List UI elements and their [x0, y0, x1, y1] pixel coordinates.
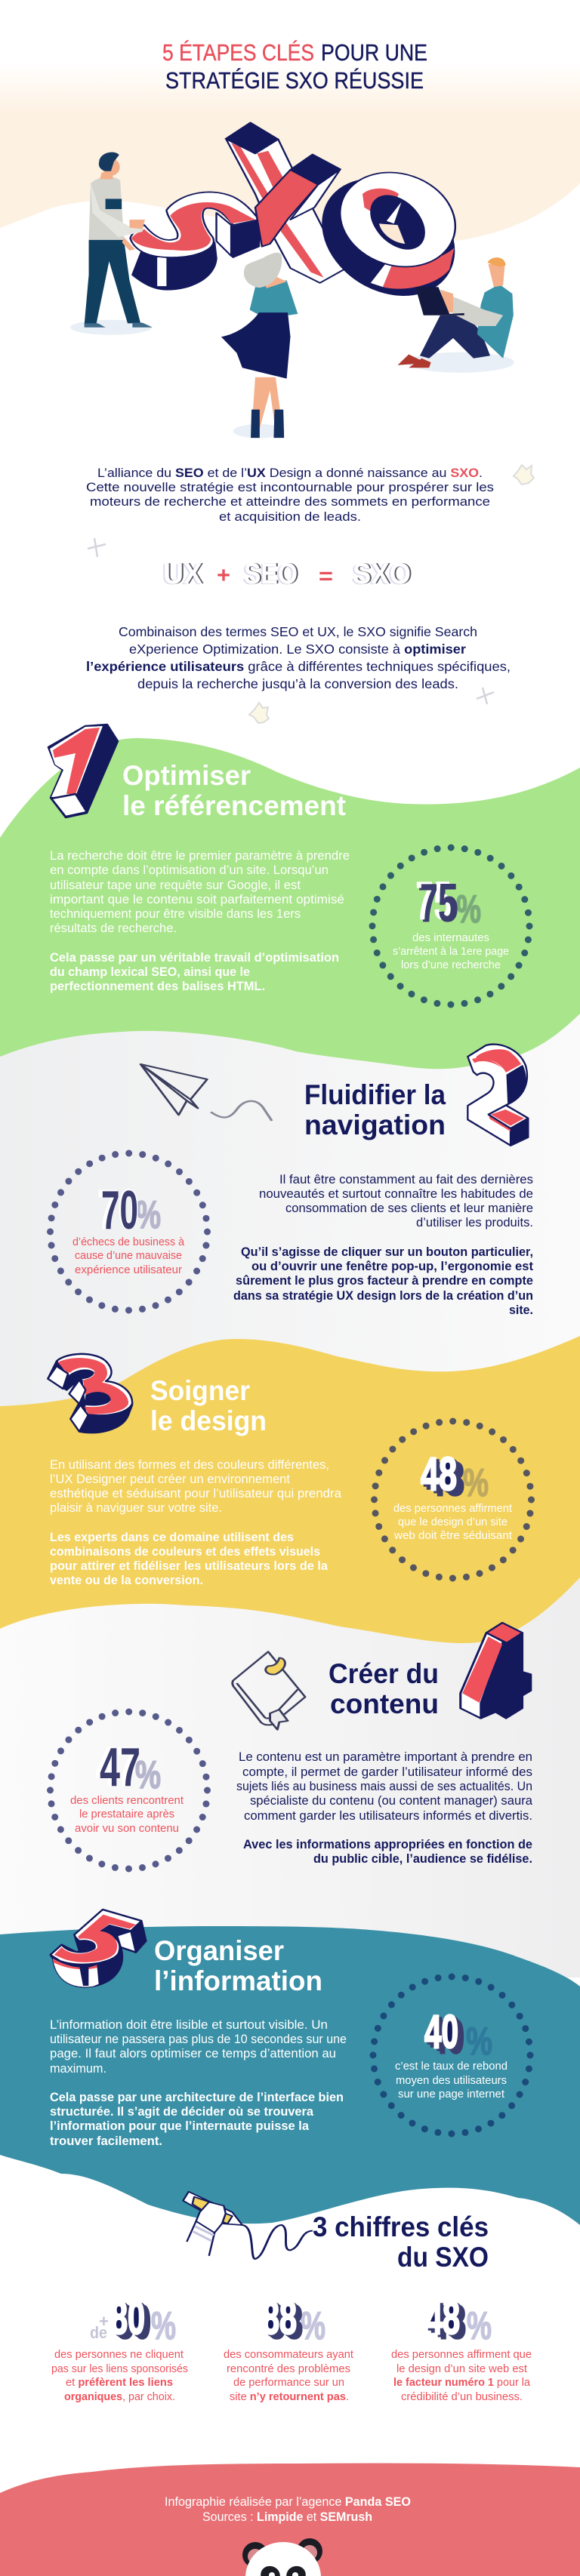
- hero illustration: [70, 122, 514, 438]
- letter X: [226, 122, 344, 283]
- heading: organiser l'information: l’information: [154, 1965, 322, 1996]
- person sitting with laptop: [398, 257, 514, 373]
- heading: créer du contenu: contenu: [330, 1688, 439, 1719]
- title: 5 ÉTAPES CLÉS: [162, 39, 314, 66]
- stat circle 48%: des personnes affirment: [393, 1502, 513, 1515]
- stat circle 75%: des internautes: [412, 931, 489, 944]
- equation UX + SEO = SXO: [162, 558, 412, 591]
- equation UX + SEO = SXO: UX: [162, 559, 201, 591]
- key figure: 88%: des consommateurs ayant: [224, 2348, 354, 2361]
- stat circle 48%: 48: [427, 1454, 464, 1506]
- heading: fluidifier la navigation: [304, 1079, 446, 1140]
- stat circle 47%: 47: [100, 1737, 140, 1798]
- text block: section 4: spécialiste du contenu (ou content manager) saura: [250, 1794, 533, 1808]
- heading: soigner le design: Soigner: [150, 1375, 250, 1406]
- equation UX + SEO = SXO: +: [217, 563, 230, 588]
- definition paragraph: Combinaison des termes SEO et UX, le SXO signifie Search: [119, 624, 477, 639]
- text block: section 4: sujets liés au business mais aussi de ses actualités. Un: [236, 1780, 532, 1793]
- key figure: 80%: +: [99, 2312, 109, 2331]
- text block: section 2: ou d’ouvrir une fenêtre pop-up, l’ergonomie est: [251, 1260, 534, 1273]
- heading: fluidifier la navigation: Fluidifier la: [304, 1079, 446, 1110]
- text block: section 5: L’information doit être lisible et surtout visible. Un: [50, 2018, 328, 2032]
- text block: section 4: du public cible, l’audience se fidélise.: [313, 1852, 532, 1866]
- text block: section 2: sûrement le plus gros facteur à prendre en compte: [236, 1274, 533, 1288]
- icon: panda mascot: [242, 2538, 322, 2576]
- text block: section 3: esthétique et séduisant pour l’utilisateur qui prendra: [50, 1487, 342, 1500]
- text block: section 4: Le contenu est un paramètre important à prendre en: [239, 1750, 532, 1764]
- stat circle 47%: 47: [96, 1737, 137, 1797]
- text block: section 4: compte, il permet de garder l’utilisateur informé des: [242, 1765, 532, 1779]
- numeral 4: [461, 1623, 531, 1719]
- text block: section 1: perfectionnement des balises HTML.: [50, 980, 265, 993]
- text block: section 1: La recherche doit être le premier paramètre à prendre: [50, 849, 350, 863]
- text block: section 3: l’UX Designer peut créer un environnement: [50, 1473, 290, 1486]
- stat circle 75%: s’arrêtent à la 1ere page: [393, 945, 509, 958]
- cross decoration: [477, 688, 494, 704]
- intro paragraph: Cette nouvelle stratégie est incontournable pour prospérer sur les: [86, 481, 494, 494]
- stat circle 70%: %: [136, 1193, 161, 1237]
- key figure: 88%: 88: [262, 2292, 297, 2344]
- stat circle 40%: [373, 1977, 530, 2134]
- equation UX + SEO = SXO: SEO: [242, 559, 296, 591]
- person standing centre: [221, 253, 298, 438]
- star decoration: [514, 465, 534, 485]
- text block: section 3: combinaisons de couleurs et des effets visuels: [50, 1545, 320, 1559]
- text block: section 2: nouveautés et surtout connaître les habitudes de: [259, 1187, 533, 1201]
- stat circle 70%: 70: [101, 1180, 138, 1241]
- footer credits: Sources : Limpide et SEMrush: [202, 2510, 372, 2524]
- person standing left: [70, 152, 153, 335]
- key figure: 88%: %: [301, 2304, 325, 2348]
- equation UX + SEO = SXO: SEO: [245, 558, 299, 590]
- equation UX + SEO = SXO: =: [319, 564, 333, 589]
- heading: organiser l'information: Organiser: [154, 1935, 284, 1966]
- equation UX + SEO = SXO: SXO: [351, 559, 409, 591]
- stat circle 47%: des clients rencontrent: [70, 1794, 184, 1807]
- text block: section 3: En utilisant des formes et des couleurs différentes,: [50, 1458, 329, 1472]
- stat circle 70%: d’échecs de business à: [72, 1236, 185, 1248]
- text block: section 1: résultats de recherche.: [50, 922, 177, 935]
- text block: section 4: Avec les informations appropriées en fonction de: [243, 1838, 532, 1851]
- definition paragraph: l’expérience utilisateurs grâce à différentes techniques spécifiques,: [86, 659, 511, 674]
- star decoration: [249, 703, 269, 723]
- equation UX + SEO = SXO: UX: [165, 558, 204, 590]
- text block: section 4: comment garder les utilisateurs informés et divertis.: [244, 1809, 532, 1823]
- text block: section 3: plaisir à naviguer sur votre site.: [50, 1501, 222, 1515]
- letter O: [298, 158, 479, 311]
- stat circle 75%: 75: [418, 873, 458, 934]
- text block: section 2: consommation de ses clients et leur manière: [285, 1202, 533, 1215]
- grey background: section 4: [0, 1510, 580, 1977]
- text block: section 2: dans sa stratégie UX design lors de la création d’un: [233, 1289, 533, 1303]
- key figure: 80%: 80: [116, 2297, 151, 2349]
- stat circle 75%: %: [456, 888, 481, 931]
- heading: 3 chiffres clés du SXO: [313, 2211, 489, 2273]
- hero background wave: [0, 0, 580, 242]
- panel: section 3 background: [0, 1336, 580, 1643]
- key figure: 88%: [224, 2292, 354, 2403]
- key figure: 48%: 48: [425, 2292, 460, 2344]
- heading: optimiser le référencement: [122, 760, 346, 821]
- equation UX + SEO = SXO: UX: [163, 558, 202, 590]
- key figure: 88%: site n’y retournent pas.: [230, 2390, 349, 2403]
- stat circle 48%: 48: [421, 1448, 457, 1500]
- numeral 3: [48, 1354, 132, 1433]
- panel: section 1 background: [0, 738, 580, 1069]
- text block: section 3: pour attirer et fidéliser les utilisateurs lors de la: [50, 1559, 329, 1573]
- text block: section 1: techniquement pour être visible dans les 1ers: [50, 907, 301, 921]
- stat circle 47%: avoir vu son contenu: [75, 1822, 179, 1835]
- stat circle 48%: %: [463, 1461, 489, 1505]
- key figure: 80%: 80: [113, 2294, 148, 2347]
- icon: hand drawing a line: [183, 2192, 313, 2259]
- key figure: 48%: crédibilité d’un business.: [401, 2390, 523, 2403]
- key figure: 80%: [51, 2292, 188, 2403]
- text block: section 5: page. Il faut alors optimiser ce temps d’attention au: [50, 2047, 336, 2060]
- stat circle 75%: lors d’une recherche: [401, 959, 501, 971]
- heading: optimiser le référencement: le référencement: [122, 790, 346, 821]
- text block: section 3: [50, 1458, 342, 1587]
- key figure: 80%: pas sur les liens sponsorisés: [51, 2362, 188, 2375]
- heading: 3 chiffres clés du SXO: 3 chiffres clés: [313, 2211, 489, 2242]
- heading: soigner le design: le design: [150, 1405, 267, 1436]
- key figure: 80%: organiques, par choix.: [64, 2390, 175, 2403]
- stat circle 47%: le prestataire après: [79, 1808, 174, 1820]
- text block: section 5: l’information pour que l’internaute puisse la: [50, 2119, 310, 2133]
- text block: section 5: Cela passe par une architecture de l’interface bien: [50, 2091, 344, 2104]
- stat circle 47%: [50, 1712, 207, 1869]
- intro paragraph: moteurs de recherche et atteindre des sommets en performance: [90, 495, 490, 509]
- text block: section 2: [233, 1173, 534, 1317]
- key figure: 88%: de performance sur un: [233, 2376, 344, 2389]
- key figure: 80%: de: [90, 2323, 107, 2342]
- equation UX + SEO = SXO: SXO: [354, 558, 412, 590]
- stat circle 48%: web doit être séduisant: [393, 1529, 513, 1542]
- panel: section 5 background: [0, 1926, 580, 2225]
- heading: créer du contenu: Créer du: [329, 1658, 439, 1689]
- intro paragraph: et acquisition de leads.: [219, 510, 361, 524]
- panel: footer background: [0, 2464, 580, 2576]
- text block: section 5: utilisateur ne passera pas plus de 10 secondes sur une: [50, 2033, 347, 2046]
- text block: section 3: Les experts dans ce domaine utilisent des: [50, 1531, 294, 1544]
- definition paragraph: eXperience Optimization. Le SXO consiste à optimiser: [129, 642, 466, 657]
- intro paragraph: L’alliance du SEO et de l’ UX Design a donné naissance au SXO.: [97, 466, 483, 480]
- equation UX + SEO = SXO: SEO: [244, 558, 298, 590]
- stat circle 48%: [375, 1421, 532, 1578]
- title: POUR UNE: [321, 39, 427, 66]
- text block: section 2: Qu’il s’agisse de cliquer sur un bouton particulier,: [241, 1245, 533, 1259]
- heading: fluidifier la navigation: navigation: [304, 1109, 446, 1140]
- grey background: section 2: [0, 1011, 580, 1510]
- heading: organiser l'information: [154, 1935, 322, 1996]
- text block: section 1: utilisateur tape une requête sur Google, il est: [50, 879, 301, 892]
- title: [162, 39, 427, 94]
- key figure: 80%: et préfèrent les liens: [66, 2376, 173, 2389]
- text block: section 5: structurée. Il s’agit de décider où se trouvera: [50, 2105, 314, 2119]
- stat circle 75%: [372, 848, 529, 1005]
- text block: section 3: vente ou de la conversion.: [50, 1574, 203, 1587]
- footer credits: [165, 2495, 411, 2524]
- text block: section 4: [236, 1750, 533, 1866]
- text block: section 1: [50, 849, 350, 993]
- stat circle 48%: que le design d’un site: [398, 1516, 508, 1528]
- key figure: 48%: 48: [428, 2294, 463, 2347]
- intro paragraph: [86, 466, 494, 524]
- key figure: 48%: le facteur numéro 1 pour la: [393, 2376, 531, 2389]
- cross decoration: [88, 538, 106, 557]
- heading: soigner le design: [150, 1375, 267, 1436]
- stat circle 70%: 70: [97, 1180, 139, 1240]
- text block: section 5: [50, 2018, 347, 2148]
- key figure: 80%: des personnes ne cliquent: [54, 2348, 184, 2361]
- icon: paper plane: [140, 1064, 272, 1121]
- key figure: 48%: [391, 2292, 532, 2403]
- heading: créer du contenu: [329, 1658, 439, 1719]
- title: STRATÉGIE SXO RÉUSSIE: [165, 67, 424, 94]
- definition paragraph: [86, 624, 511, 691]
- stat circle 47%: %: [135, 1753, 161, 1797]
- letter S: [130, 192, 259, 290]
- heading: optimiser le référencement: Optimiser: [122, 760, 251, 791]
- icon: book with heart: [233, 1651, 305, 1730]
- text block: section 5: maximum.: [50, 2062, 106, 2076]
- numeral 1: [48, 725, 118, 817]
- stat circle 40%: 40: [430, 2011, 464, 2064]
- stat circle 40%: sur une page internet: [398, 2088, 505, 2101]
- text block: section 5: trouver facilement.: [50, 2134, 162, 2148]
- text block: section 1: important que le contenu soit parfaitement optimisé: [50, 893, 344, 906]
- stat circle 40%: 40: [424, 2006, 458, 2058]
- key figure: 48%: des personnes affirment que: [391, 2348, 532, 2361]
- stat circle 40%: moyen des utilisateurs: [396, 2074, 507, 2087]
- key figure: 88%: 88: [265, 2294, 300, 2347]
- stat circle 70%: expérience utilisateur: [75, 1263, 182, 1276]
- text block: section 1: du champ lexical SEO, ainsi que le: [50, 965, 250, 979]
- stat circle 75%: 75: [415, 871, 452, 931]
- text block: section 2: Il faut être constamment au fait des dernières: [279, 1173, 533, 1186]
- numeral 2: [467, 1045, 528, 1146]
- stat circle 75%: 75: [420, 873, 456, 934]
- key figure: 88%: 88: [268, 2297, 303, 2349]
- key figure: 48%: le design d’un site web est: [396, 2362, 528, 2375]
- stat circle 40%: %: [466, 2020, 492, 2064]
- key figure: 80%: %: [151, 2304, 176, 2348]
- stat circle 70%: [50, 1153, 207, 1310]
- equation UX + SEO = SXO: SXO: [353, 558, 411, 590]
- stat circle 70%: cause d’une mauvaise: [75, 1249, 182, 1262]
- text block: section 1: en compte dans l’optimisation d’un site. Lorsqu’un: [50, 863, 329, 877]
- text block: section 2: d’utiliser les produits.: [416, 1216, 533, 1230]
- numeral 5: [51, 1910, 146, 1987]
- definition paragraph: depuis la recherche jusqu’à la conversion des leads.: [137, 676, 458, 691]
- heading: 3 chiffres clés du SXO: du SXO: [397, 2242, 489, 2273]
- key figure: 48%: 48: [431, 2297, 466, 2349]
- stat circle 40%: 40: [427, 2008, 461, 2060]
- text block: section 2: site.: [509, 1303, 533, 1317]
- footer credits: Infographie réalisée par l’agence Panda SEO: [165, 2495, 411, 2509]
- key figure: 88%: rencontré des problèmes: [227, 2362, 350, 2375]
- stat circle 40%: c’est le taux de rebond: [395, 2060, 508, 2073]
- key figure: 48%: %: [467, 2304, 492, 2348]
- key figure: 80%: 80: [110, 2292, 145, 2344]
- text block: section 1: Cela passe par un véritable travail d’optimisation: [50, 951, 339, 965]
- stat circle 48%: 48: [424, 1451, 460, 1503]
